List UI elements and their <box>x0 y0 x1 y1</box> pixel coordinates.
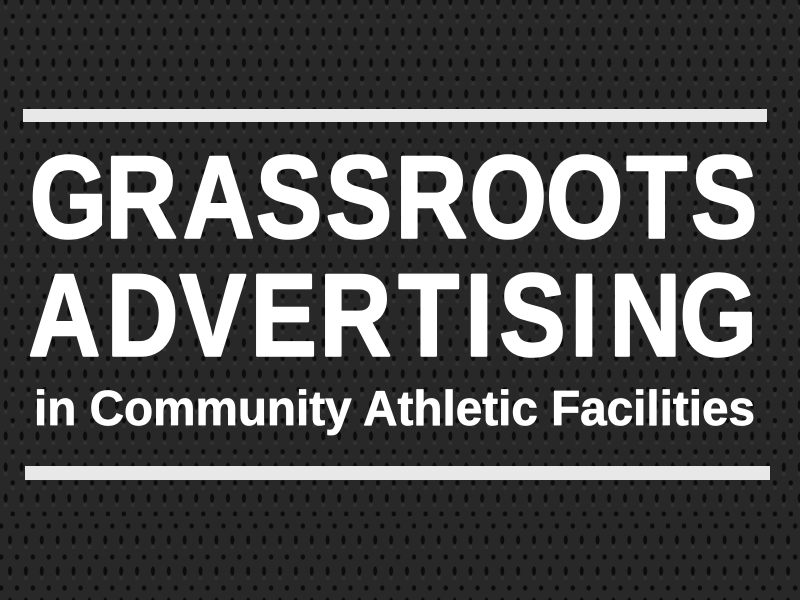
bottom rule <box>25 466 770 480</box>
subtitle: in Community Athletic Facilities <box>34 382 755 436</box>
heading line: ADVERTISING: ADVERTISING <box>28 251 757 381</box>
top rule <box>23 109 767 122</box>
heading line: GRASSROOTS: GRASSROOTS <box>30 133 757 263</box>
